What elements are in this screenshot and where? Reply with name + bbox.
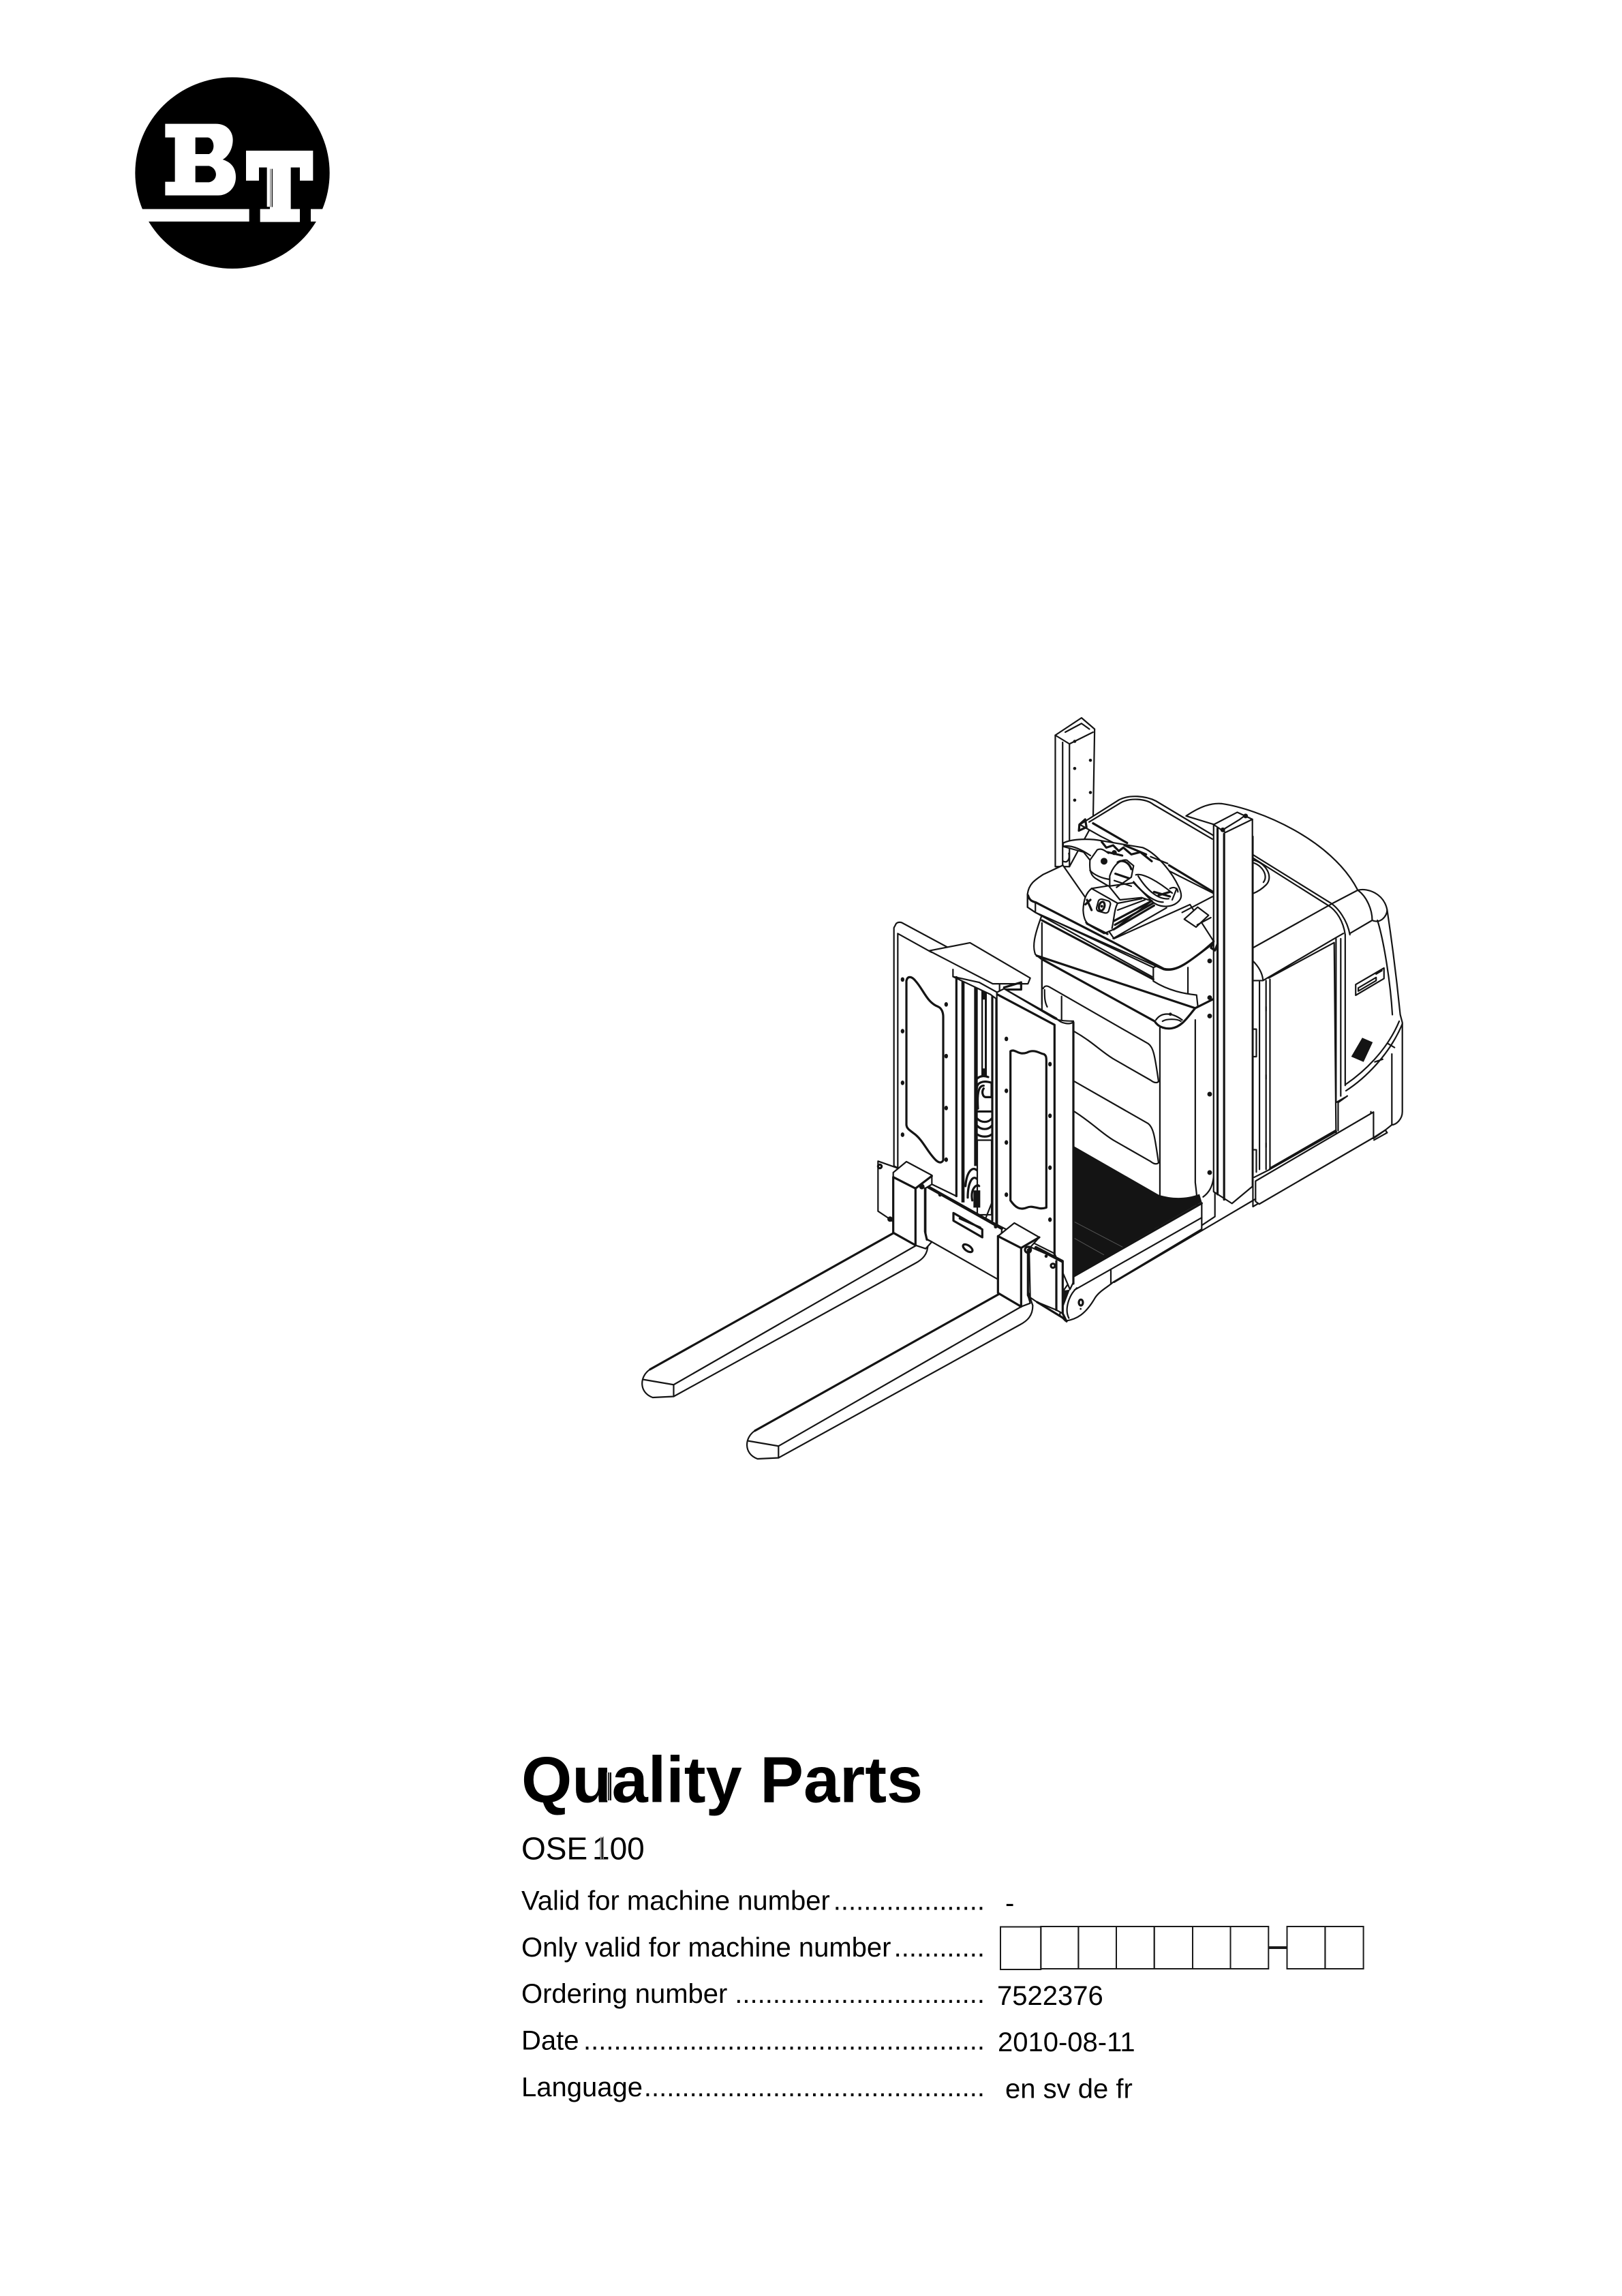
front chassis nose [1060,1203,1202,1321]
front mast post [1211,813,1253,1203]
black floor mat [1073,1146,1202,1275]
model name: OSE [521,1831,587,1867]
left fork block [893,1162,932,1249]
upper wavy pocket [1043,986,1159,1083]
pedal [1184,907,1208,927]
chassis side rail [1114,1112,1373,1282]
row: date: Date [521,2026,579,2056]
row: language: ............................................. [644,2072,985,2102]
left door panel [894,922,1000,1218]
operator handrail [1080,796,1215,894]
title: Quality Parts [521,1744,923,1816]
left fork [642,1228,928,1398]
row: date: 2010-08-11 [998,2027,1135,2057]
top plate [929,943,1030,984]
illustration: order picker forklift truck [642,718,1403,1459]
row: language: Language [521,2072,643,2102]
icon: BT logo [135,77,331,269]
right door window [1011,1051,1046,1209]
row: ordering number: Ordering number [521,1979,727,2009]
fork carriage [878,1161,1083,1321]
row: valid for machine number: Valid for machine number [521,1886,830,1916]
model name: 100 [592,1831,645,1867]
row: valid for machine number [521,1886,1014,1918]
control platform [1028,865,1214,970]
black decal [1351,1038,1373,1062]
front doors and mast [894,922,1202,1321]
row: ordering number [521,1979,1103,2011]
right fork block [998,1223,1039,1307]
rear hood [1186,804,1403,1207]
machine number entry boxes [1000,1927,1364,1969]
right fork [747,1290,1032,1459]
mast interior with lift cylinder [956,977,998,1225]
truck rear body and column [1028,796,1403,1230]
column below platform [1034,915,1215,1230]
label plate on hood [1356,968,1384,995]
row: valid for machine number: - [1005,1888,1014,1918]
back mast post [1055,718,1095,866]
row: only valid for machine number: ............ [894,1933,985,1963]
row: only valid for machine number: Only valid for machine number [521,1933,891,1963]
right bracket plate [1029,1246,1062,1314]
title artefact mark [606,1772,611,1800]
row: date: ..................................................... [583,2026,985,2056]
tiller arm and handle [1063,839,1181,907]
row: date [521,2026,1135,2057]
right door panel [997,988,1073,1289]
row: ordering number: ................................. [735,1979,985,2009]
row: language: en sv de fr [1005,2074,1133,2104]
row: language [521,2072,1133,2104]
lower wavy pocket [1075,1082,1159,1164]
carriage plate [925,1186,1002,1280]
left door window [906,977,943,1162]
model name [521,1831,645,1867]
console body [1083,886,1152,933]
left bracket plate [878,1161,898,1227]
forks [642,1228,1032,1459]
nose wedge and hole [1062,1290,1070,1309]
row: ordering number: 7522376 [997,1981,1103,2011]
row: valid for machine number: .................... [833,1886,985,1916]
tiller and control console [1063,839,1211,939]
